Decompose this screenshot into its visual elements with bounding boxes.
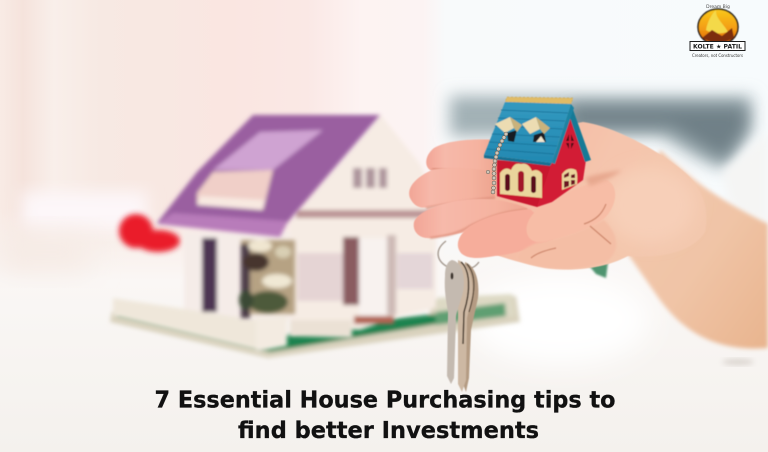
mini house: side window xyxy=(562,169,577,190)
hand: second finger xyxy=(409,168,495,208)
house: red decoration xyxy=(119,214,180,252)
hand: gap shadow 3 xyxy=(430,210,528,238)
house: walls and gable xyxy=(113,114,438,352)
house: shrub xyxy=(239,240,295,318)
key ring xyxy=(438,241,479,268)
keys xyxy=(438,241,479,392)
green blur under hand xyxy=(586,262,608,278)
front key xyxy=(445,260,464,384)
hand: gap shadow 1 xyxy=(432,169,495,174)
back key xyxy=(463,262,478,392)
logo: Kolte Patil xyxy=(690,4,745,59)
title line 2: find better Investments xyxy=(238,416,539,444)
mini house: round attic window xyxy=(566,134,574,149)
house: base lawn xyxy=(110,294,520,358)
mini house: red side wall xyxy=(537,110,586,207)
house: purple roof xyxy=(157,115,380,237)
hand: palm xyxy=(470,122,706,270)
bead chain xyxy=(486,132,508,194)
logo: name banner: KOLTE ★ PATIL xyxy=(693,44,742,51)
blurred toy house in background xyxy=(110,114,520,358)
hand: crease shadow xyxy=(531,204,611,258)
hand: top finger xyxy=(426,139,500,174)
hand: palm heel xyxy=(518,220,616,269)
mini house: blue roof xyxy=(484,102,571,163)
mini house: dormers xyxy=(495,117,550,142)
mini house: teal fascia xyxy=(570,104,591,162)
hand: fourth finger xyxy=(458,209,560,258)
hand: thumb xyxy=(526,180,615,242)
hand: third finger xyxy=(414,199,530,238)
logo: tagline above emblem: Dream Big xyxy=(706,4,730,10)
logo: strapline: Creators, not Constructors xyxy=(692,53,744,59)
title xyxy=(154,386,616,444)
arm xyxy=(625,150,768,349)
title line 1: 7 Essential House Purchasing tips to xyxy=(154,386,616,414)
hand: gap shadow 2 xyxy=(426,198,495,208)
middle key xyxy=(458,260,472,392)
hand xyxy=(409,122,706,270)
miniature red house xyxy=(484,97,591,207)
hand: palm highlight xyxy=(605,167,695,243)
hand: shadow beside mini house xyxy=(585,170,622,186)
mini house: red front wall xyxy=(497,160,552,207)
logo: sun emblem xyxy=(698,9,738,45)
mini house: gold ridge xyxy=(505,97,573,104)
mini house: arched window front xyxy=(500,164,542,198)
